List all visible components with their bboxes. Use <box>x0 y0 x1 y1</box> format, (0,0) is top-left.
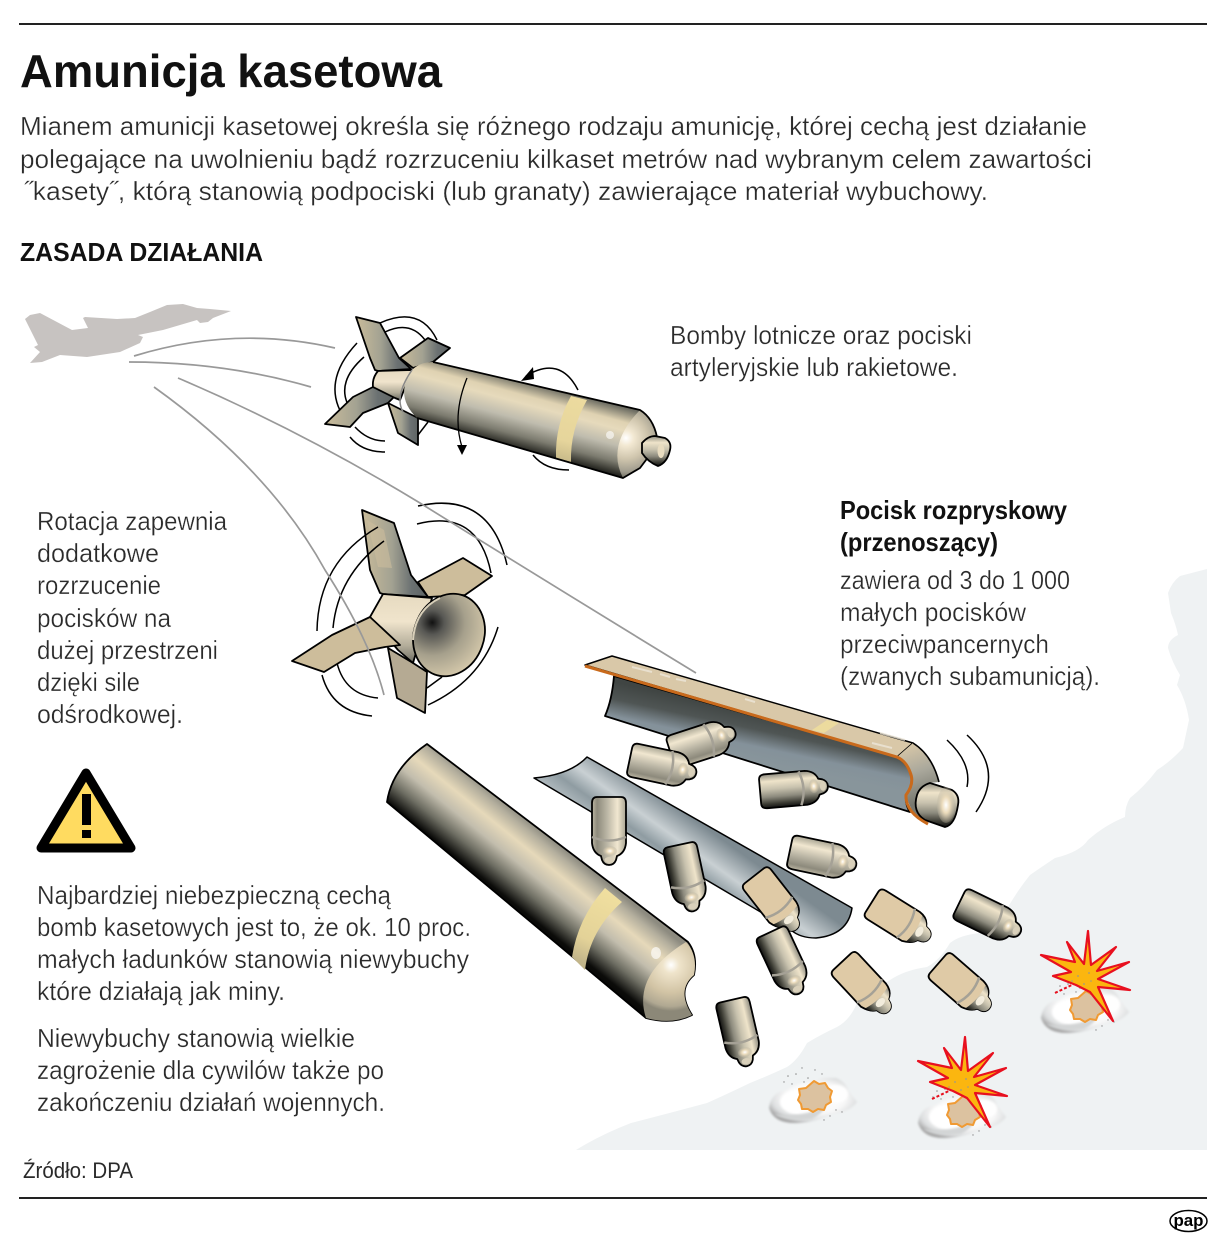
intro paragraph: polegające na uwolnieniu bądź rozrzuceniu kilkaset metrów nad wybranym celem zawartości <box>20 144 1092 174</box>
text: warning: bomb kasetowych jest to, że ok. 10 proc. <box>37 912 471 942</box>
text: warning: które działają jak miny. <box>37 976 285 1006</box>
trajectory lines <box>129 338 696 695</box>
fins <box>400 338 450 368</box>
text: carrier shell description: (zwanych subamunicją). <box>840 661 1100 691</box>
body <box>404 362 657 478</box>
text: civilians: zagrożenie dla cywilów także po <box>37 1055 384 1085</box>
illustration: spinning tail section <box>292 503 507 716</box>
submunitions <box>592 716 1028 1070</box>
text: rotation note: odśrodkowej. <box>37 699 183 729</box>
callout: bombs description: Bomby lotnicze oraz pociski <box>670 320 972 350</box>
callout: bombs description: artyleryjskie lub rakietowe. <box>670 352 958 382</box>
text: rotation note: pocisków na <box>37 603 172 633</box>
intro paragraph: ˝kasety˝, którą stanowią podpociski (lub granaty) zawierające materiał wybuchowy. <box>24 176 988 206</box>
section heading: ZASADA DZIAŁANIA <box>20 237 263 267</box>
icon: warning triangle <box>41 773 131 848</box>
illustration: intact cluster bomb <box>325 317 670 478</box>
text: carrier shell description: (przenoszący) <box>840 527 998 557</box>
arrow: rotation down <box>458 378 467 447</box>
top rule <box>19 23 1207 25</box>
text: rotation note <box>37 506 227 729</box>
text: rotation note: dodatkowe <box>37 538 159 568</box>
illustration: upper casing half with orange edge <box>585 656 989 827</box>
text: rotation note: rozrzucenie <box>37 570 161 600</box>
text: carrier shell description: małych pocisków <box>840 597 1026 627</box>
text: civilians: Niewybuchy stanowią wielkie <box>37 1023 355 1053</box>
illustration: lower casing half, steel <box>534 757 852 938</box>
source: Źródło: DPA <box>23 1158 133 1183</box>
illustration: large casing half <box>387 744 695 1021</box>
text: warning <box>37 880 471 1006</box>
text: rotation note: dużej przestrzeni <box>37 635 218 665</box>
icon: fighter jet silhouette <box>25 304 231 363</box>
title: Amunicja kasetowa <box>20 45 442 97</box>
text: carrier shell description: zawiera od 3 do 1 000 <box>840 565 1070 595</box>
logo: PAP: pap <box>1174 1211 1204 1230</box>
intro paragraph: Mianem amunicji kasetowej określa się różnego rodzaju amunicję, której cechą jest działanie <box>20 111 1087 141</box>
terrain background <box>576 569 1207 1150</box>
text: rotation note: Rotacja zapewnia <box>37 506 227 536</box>
text: warning: małych ładunków stanowią niewybuchy <box>37 944 469 974</box>
text: civilians <box>37 1023 385 1117</box>
callout: bombs description <box>670 320 972 382</box>
text: carrier shell description: Pocisk rozpryskowy <box>840 495 1067 525</box>
text: carrier shell description: przeciwpancernych <box>840 629 1049 659</box>
tail cone <box>373 370 412 400</box>
explosions <box>769 931 1130 1138</box>
arrowhead: rotation <box>521 367 534 381</box>
intro paragraph <box>20 111 1092 206</box>
text: rotation note: dzięki sile <box>37 667 140 697</box>
text: carrier shell description <box>840 495 1100 691</box>
text: warning: Najbardziej niebezpieczną cechą <box>37 880 392 910</box>
bottom rule <box>19 1197 1207 1199</box>
text: civilians: zakończeniu działań wojennych. <box>37 1087 385 1117</box>
